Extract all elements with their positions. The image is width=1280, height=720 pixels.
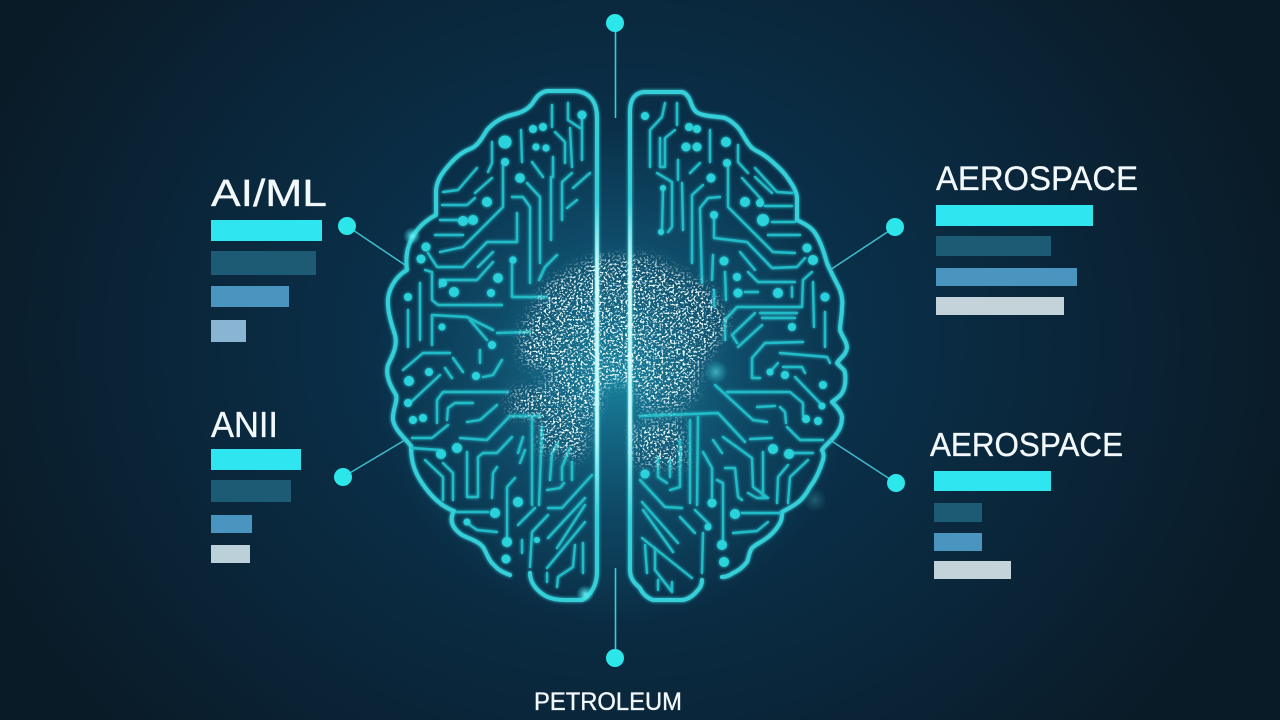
central glow xyxy=(375,125,855,625)
bright inner edges xyxy=(596,200,632,520)
bottom node xyxy=(606,568,624,667)
particle cloud xyxy=(500,248,736,476)
heading: AEROSPACE upper: AEROSPACE xyxy=(936,160,1138,198)
connector: lower right xyxy=(830,440,905,492)
left hemisphere circuit xyxy=(387,91,597,600)
panel: AEROSPACE lower xyxy=(930,426,1123,579)
panel: AEROSPACE upper xyxy=(936,160,1138,315)
top node xyxy=(606,14,624,118)
bar chart: ANII xyxy=(211,449,301,563)
panel: ANII xyxy=(211,404,301,563)
bar chart: AEROSPACE upper xyxy=(936,205,1093,315)
heading: AI/ML: AI/ML xyxy=(211,173,327,215)
panel: AI/ML xyxy=(211,173,327,342)
brain illustration xyxy=(387,91,847,603)
heading: AEROSPACE lower: AEROSPACE xyxy=(930,426,1123,463)
connector: lower left xyxy=(334,440,405,486)
hot spots xyxy=(403,227,827,603)
footer label: PETROLEUM xyxy=(534,688,682,716)
heading: ANII: ANII xyxy=(211,404,278,445)
bar chart: AEROSPACE lower xyxy=(934,471,1051,579)
right hemisphere circuit xyxy=(630,92,847,600)
bar chart: AI/ML xyxy=(211,220,322,342)
connector: upper left xyxy=(338,217,405,265)
connector: upper right xyxy=(830,218,904,270)
